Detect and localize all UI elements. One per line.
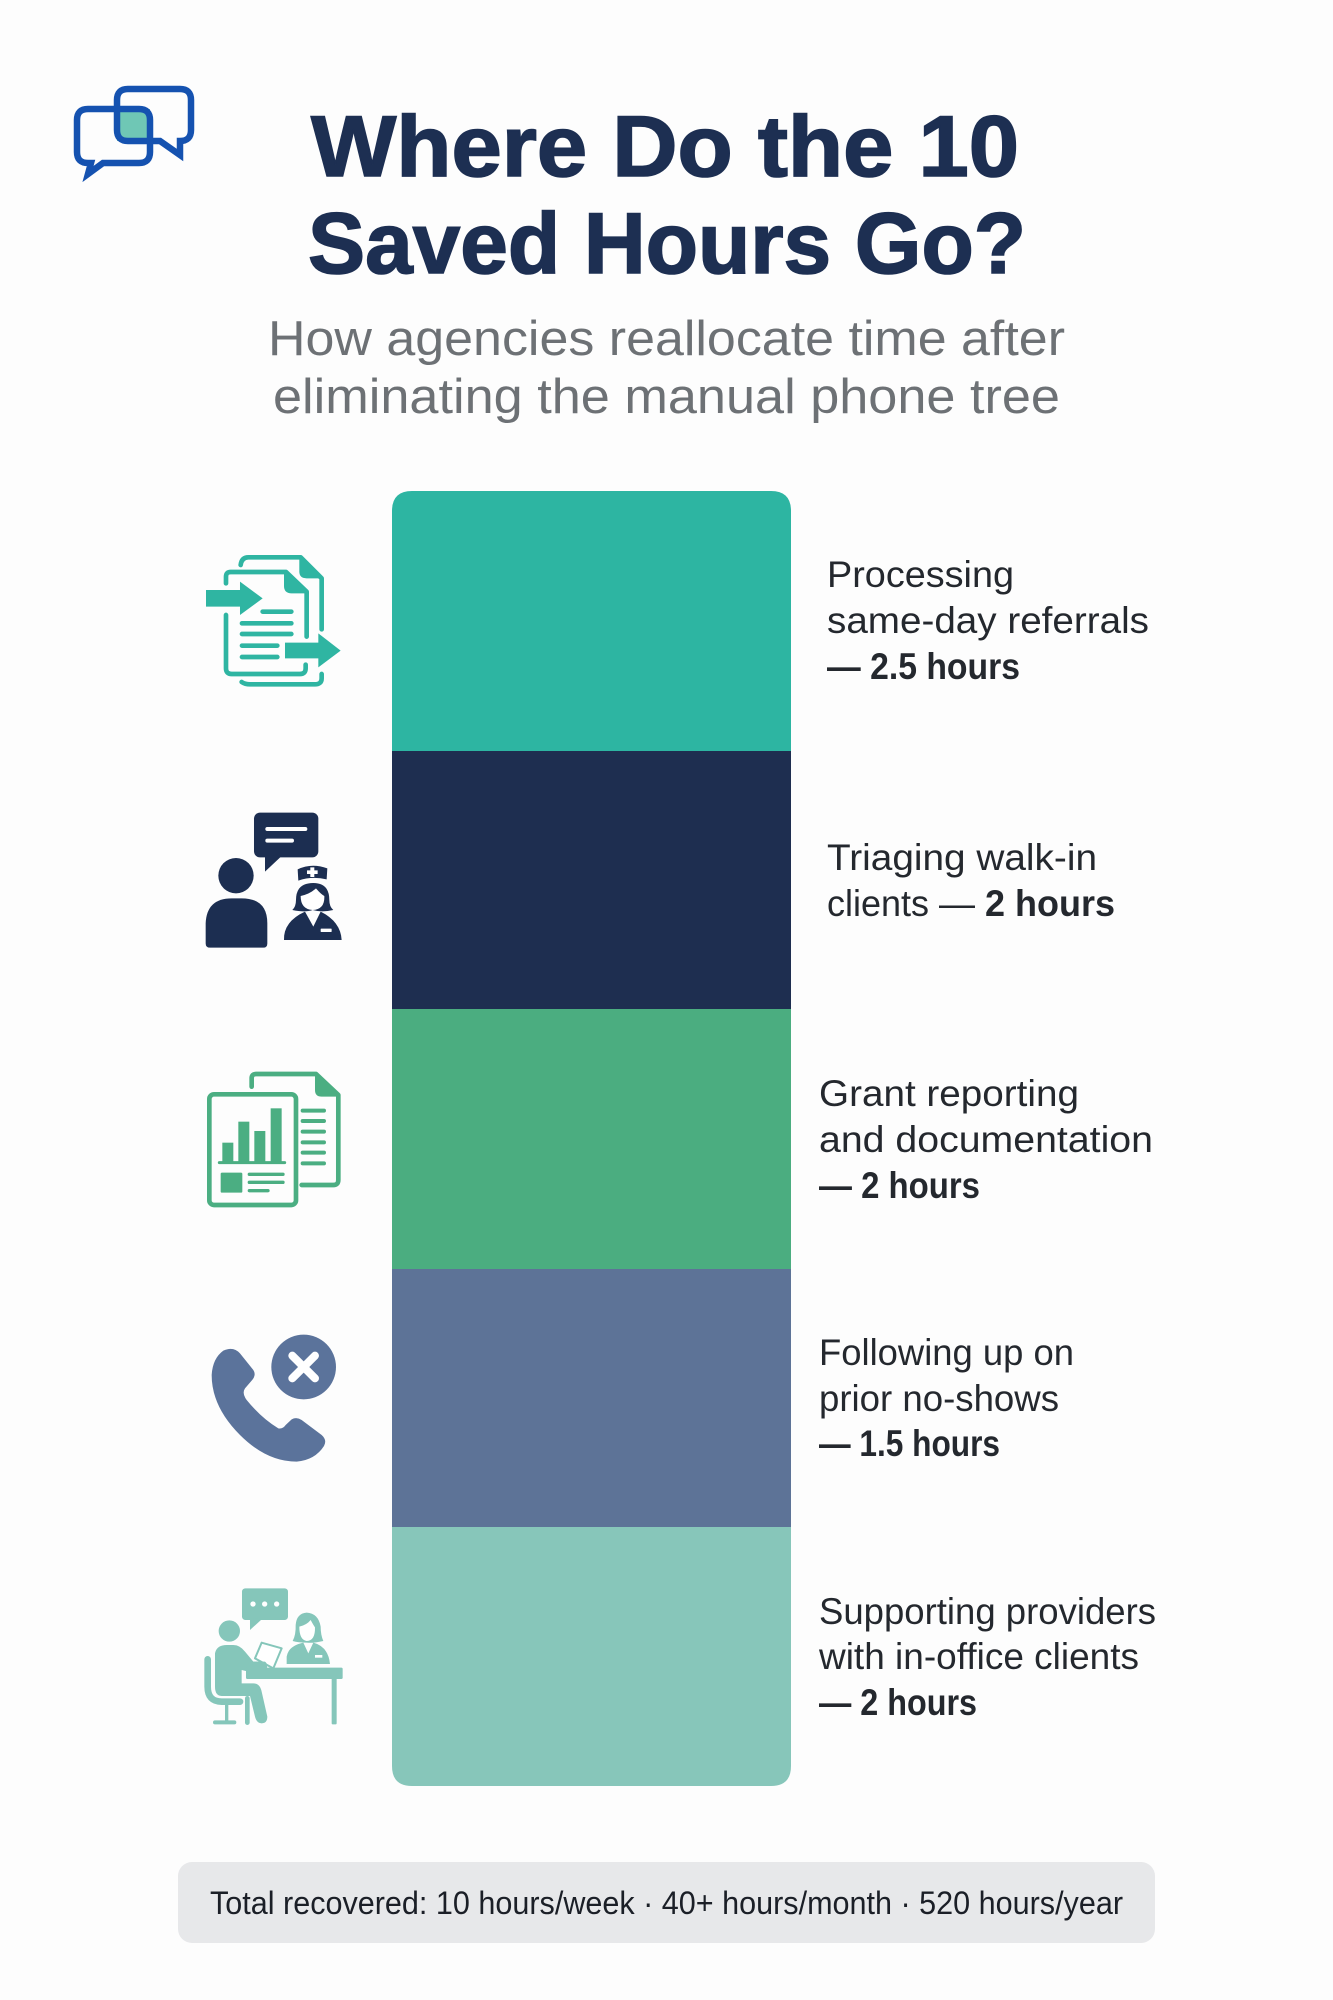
subtitle: How agencies reallocate time after — [268, 312, 1065, 366]
label: supporting providers: with in-office clients — [818, 1636, 1139, 1677]
label: supporting providers — [818, 1591, 1156, 1723]
label: walk-in clients: clients — 2 hours — [827, 883, 1115, 924]
label: grant reporting: — 2 hours — [819, 1165, 980, 1206]
label: no-show follow-ups: — 1.5 hours — [819, 1423, 1000, 1464]
icon: documents with arrows — [206, 557, 341, 684]
label: same-day referrals: same-day referrals — [827, 600, 1149, 641]
label: grant reporting: and documentation — [819, 1119, 1153, 1160]
label: no-show follow-ups: Following up on — [819, 1332, 1074, 1373]
subtitle: eliminating the manual phone tree — [273, 370, 1060, 424]
label: same-day referrals — [827, 554, 1149, 687]
icon: provider meeting client at desk — [208, 1588, 343, 1724]
icon: overlapping speech bubbles logo — [77, 89, 191, 174]
subtitle — [268, 312, 1065, 424]
footer summary bar: Total recovered: 10 hours/week · 40+ hours/month · 520 hours/year — [210, 1885, 1123, 1921]
label: supporting providers: Supporting providers — [819, 1591, 1156, 1632]
icon: reports with bar chart — [209, 1074, 338, 1205]
title — [308, 99, 1026, 292]
label: walk-in clients — [827, 837, 1115, 924]
stacked bar chart — [392, 491, 791, 1786]
icon: phone with cancel mark — [212, 1335, 336, 1462]
label: supporting providers: — 2 hours — [819, 1682, 977, 1723]
label: same-day referrals: — 2.5 hours — [827, 646, 1020, 687]
footer summary bar — [178, 1862, 1155, 1943]
label: no-show follow-ups — [819, 1332, 1074, 1464]
label: grant reporting — [819, 1073, 1153, 1206]
title: Saved Hours Go? — [308, 196, 1026, 292]
title: Where Do the 10 — [311, 99, 1019, 195]
label: grant reporting: Grant reporting — [819, 1073, 1079, 1114]
label: no-show follow-ups: prior no-shows — [819, 1378, 1059, 1419]
label: same-day referrals: Processing — [827, 554, 1014, 595]
icon: client talking to nurse — [206, 813, 342, 948]
label: walk-in clients: Triaging walk-in — [827, 837, 1097, 878]
